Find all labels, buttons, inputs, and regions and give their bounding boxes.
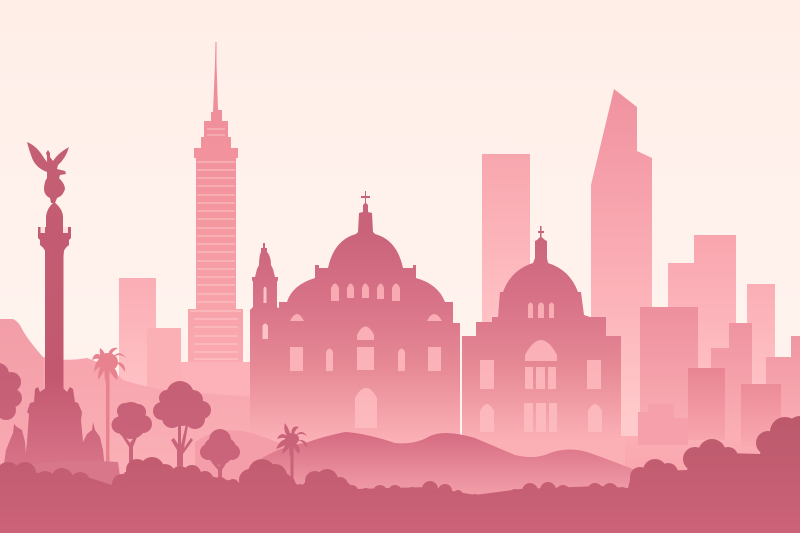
left background blocks xyxy=(119,278,181,408)
bell tower xyxy=(250,243,282,440)
rolling hills xyxy=(262,432,640,500)
tree C xyxy=(200,429,240,478)
right ground band xyxy=(621,436,800,500)
left edge tree xyxy=(0,363,22,420)
tower floor lines xyxy=(190,129,241,359)
tree B xyxy=(153,381,211,466)
monument pedestal xyxy=(24,372,86,470)
right narrow tower xyxy=(747,284,775,440)
palace dome left xyxy=(279,191,460,440)
side statue left xyxy=(3,424,27,470)
upper arched windows xyxy=(290,284,442,428)
column shaft and capital xyxy=(38,202,71,390)
foreground foliage xyxy=(0,416,800,533)
balcony openings xyxy=(40,227,68,233)
palm tree centre xyxy=(276,423,307,481)
far glass towers xyxy=(119,89,736,440)
middle tower xyxy=(482,154,530,334)
ground under buildings xyxy=(245,438,625,498)
back hill left xyxy=(195,430,305,495)
bell tower windows xyxy=(262,286,268,339)
palm tree left xyxy=(92,348,126,462)
round trees xyxy=(112,381,240,478)
mound beneath monument xyxy=(0,461,122,490)
palace dome right xyxy=(462,226,621,440)
Torre Latinoamericana xyxy=(188,42,243,365)
tall angled tower xyxy=(591,89,652,440)
left hills xyxy=(0,319,46,490)
angel statue xyxy=(27,142,69,203)
tree A xyxy=(112,402,152,462)
right palace windows xyxy=(480,302,602,432)
side statue right xyxy=(80,422,105,470)
Angel of Independence monument xyxy=(3,142,105,470)
right midground blocks xyxy=(638,307,800,446)
haze behind Latino tower base xyxy=(181,362,253,422)
ground haze band xyxy=(43,357,255,490)
right back blocks xyxy=(668,235,736,440)
